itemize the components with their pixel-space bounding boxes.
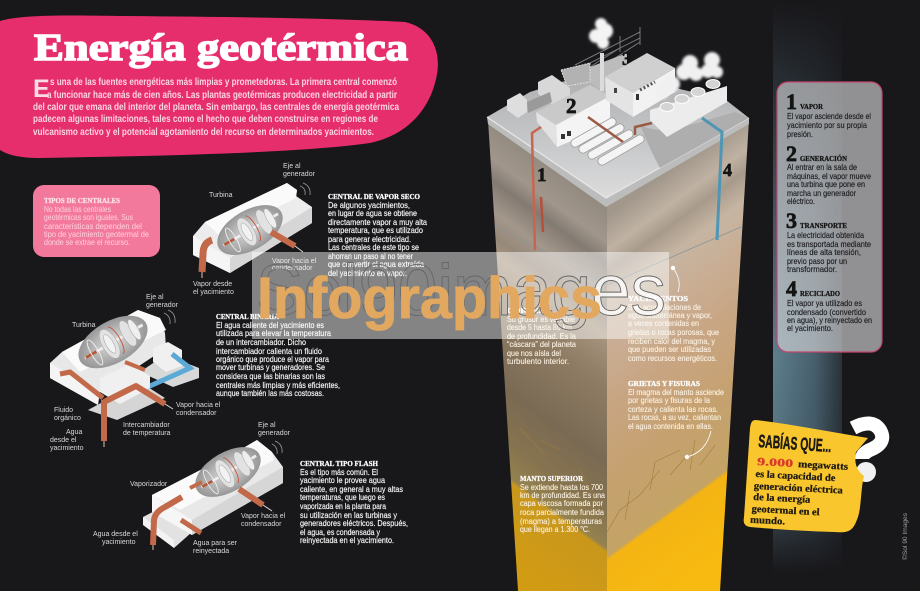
text: central de vapor seco: ahorran un paso al no tener	[328, 251, 413, 261]
text: yacimientos: grietas o rocas porosas, que	[628, 327, 719, 337]
step 1: yacimiento por su propia	[787, 120, 867, 130]
step 2: GENERACIÓN	[800, 153, 847, 163]
text: central binaria: utilizada para elevar la temperatura	[216, 328, 331, 338]
geological block	[487, 70, 749, 591]
step 3: previo paso por un	[787, 256, 847, 266]
step 4: el yacimiento.	[787, 323, 833, 333]
machine: tipo flash	[143, 437, 283, 550]
panel: tipos de centrales: características dependen del	[44, 222, 142, 231]
panel: tipos de centrales: donde se extrae el recurso.	[44, 238, 130, 247]
left face	[488, 120, 607, 591]
text: corteza	[507, 306, 576, 366]
labels: central binaria: Turbina	[72, 322, 96, 329]
label 1: 1	[537, 165, 546, 186]
text: central binaria: de un intercambiador. Dicho	[216, 337, 306, 347]
labels: vapor seco: generador	[283, 171, 316, 178]
step 4	[786, 276, 872, 333]
power plant	[507, 18, 727, 161]
header pink shape	[0, 16, 438, 158]
label 4: 4	[723, 160, 732, 180]
step 2: 2	[786, 141, 797, 166]
text: central tipo flash: CENTRAL TIPO FLASH	[300, 459, 378, 468]
title: Energía geotérmica	[34, 27, 408, 69]
machine: central binaria	[50, 305, 199, 447]
bubble text: geotermal en el	[751, 504, 820, 518]
bubble text	[750, 456, 848, 531]
labels: vapor seco	[193, 163, 317, 296]
labels: vapor seco: Eje al	[283, 163, 301, 170]
text: manto superior: km de profundidad. Es una	[520, 490, 605, 500]
cooling tower base	[650, 86, 727, 137]
step 1: 1	[786, 89, 797, 114]
text: central de vapor seco: para generar electricidad.	[328, 234, 411, 244]
text: corteza: CORTEZA	[507, 306, 552, 315]
machine: vapor seco	[193, 183, 312, 278]
text: grietas y fisuras: Las rocas, a su vez, calientan	[628, 412, 721, 422]
small buildings	[538, 75, 570, 105]
pipes	[532, 118, 732, 250]
text: central binaria: intercambiador calienta un fluido	[216, 346, 322, 356]
text: manto superior	[520, 474, 605, 534]
labels: central binaria: orgánico	[54, 415, 81, 422]
panel: tipos de centrales: TIPOS DE CENTRALES	[44, 196, 120, 205]
text: central tipo flash: generadores eléctricos. Después,	[300, 518, 408, 528]
labels: vapor seco: condensador	[272, 265, 313, 272]
text: central tipo flash: vaporizada en la planta para	[300, 501, 386, 511]
text: central tipo flash: reinyectada en el yacimiento.	[300, 535, 394, 545]
panel: tipos de centrales	[33, 185, 160, 257]
labels: tipo flash: condensador	[241, 521, 282, 528]
text: central binaria: orgánico que produce el vapor para	[216, 354, 329, 364]
callout: sabías que	[744, 420, 882, 532]
text: grietas y fisuras: GRIETAS Y FISURAS	[628, 379, 700, 388]
bubble text: megawatts	[798, 459, 848, 473]
labels: vapor seco: Vapor hacia el	[272, 258, 317, 265]
text: corteza: “cáscara” del planeta	[507, 339, 576, 349]
text: central tipo flash: caliente, en general a muy altas	[300, 484, 403, 494]
step 2: Al entrar en la sala de	[787, 162, 857, 172]
labels: tipo flash: reinyectada	[193, 548, 229, 555]
intro text: padecen algunas limitaciones, tales como el hecho que deben construirse en regiones de	[33, 114, 378, 125]
text: central binaria: aunque también las más costosas.	[216, 388, 324, 398]
watermark: Infographics	[257, 266, 602, 331]
right face	[607, 120, 749, 591]
condenser cylinders	[575, 122, 640, 161]
top face	[487, 70, 749, 198]
grey yard	[640, 112, 749, 168]
labels: central binaria: condensador	[176, 410, 217, 417]
text: yacimientos: como recursos energéticos.	[628, 353, 717, 363]
text: central de vapor seco: CENTRAL DE VAPOR SECO	[328, 192, 420, 201]
intro text: vulcanismo activo y el potencial agotamiento del recurso en determinados yacimientos.	[33, 127, 374, 138]
chimney	[600, 53, 604, 91]
text: central binaria	[216, 312, 340, 398]
intro text: E	[33, 75, 50, 103]
header panel	[0, 16, 438, 158]
panel: tipos de centrales: geotérmicas son iguales. Sus	[44, 213, 133, 222]
step 3: La electricidad obtenida	[787, 230, 864, 240]
labels: vapor seco: Turbina	[209, 192, 233, 199]
copper connectors	[588, 117, 652, 142]
labels: central binaria: Intercambiador	[123, 422, 170, 429]
panel: tipos de centrales: tipo de yacimiento geotermal de	[44, 230, 149, 239]
text: grietas y fisuras: corteza y calienta las rocas.	[628, 404, 718, 414]
step 2: una turbina que pone en	[787, 179, 865, 189]
text: central tipo flash	[300, 459, 408, 545]
text: grietas y fisuras	[628, 379, 724, 431]
step 2: máquinas, el vapor mueve	[787, 171, 871, 181]
production pipe	[532, 127, 541, 250]
watermark: Sol90images	[256, 251, 666, 331]
text: manto superior: capa viscosa formada por	[520, 498, 603, 508]
step 2: marcha un generador	[787, 188, 856, 198]
back wall	[590, 53, 627, 90]
text: central de vapor seco	[328, 192, 427, 278]
cooling steam	[655, 52, 723, 99]
step 4: condensado (convertido	[787, 307, 866, 317]
question mark icon	[853, 423, 882, 482]
step 2	[786, 141, 871, 206]
labels: tipo flash: Vapor hacia el	[241, 513, 286, 520]
labels: central binaria: Agua	[66, 429, 82, 436]
text: manto superior: que llegan a 1.300 °C.	[520, 524, 590, 534]
labels: tipo flash: Vaporizador	[130, 481, 168, 488]
bubble text: es la capacidad de	[755, 469, 836, 484]
credit: ©Sol 90 Images	[901, 512, 909, 560]
step 4: El vapor ya utilizado es	[787, 298, 862, 308]
panel: process steps	[777, 82, 882, 352]
cracks	[520, 428, 715, 532]
bubble text: generación eléctrica	[754, 481, 843, 497]
step 1: presión.	[787, 129, 813, 139]
pylons and lines	[575, 27, 640, 74]
labels: central binaria: de temperatura	[123, 430, 171, 437]
text: manto superior: roca parcialmente fundida	[520, 507, 604, 517]
step 4: RECICLADO	[800, 289, 840, 298]
step 3: transformador.	[787, 264, 837, 274]
intro text: del calor que emana del interior del planeta. Sin embargo, las centrales de energía geotérmica	[33, 102, 399, 113]
step 1: El vapor asciende desde el	[787, 111, 871, 121]
building 2	[536, 85, 610, 125]
text: central binaria: El agua caliente del yacimiento es	[216, 320, 324, 330]
text: central binaria: centrales más limpias y más eficientes,	[216, 380, 340, 390]
labels: tipo flash	[93, 422, 291, 555]
building 3	[605, 53, 675, 93]
fault lines	[495, 225, 741, 285]
bubble heading: SABÍAS QUE...	[758, 430, 832, 456]
step 3: 3	[786, 208, 797, 233]
labels: central binaria: Eje al	[146, 294, 164, 301]
intro text: s una de las fuentes energéticas más limpias y prometedoras. La primera central comenzó	[50, 77, 397, 88]
step 3: TRANSPORTE	[800, 221, 847, 230]
chimney smoke	[589, 18, 613, 49]
text: central tipo flash: el agua, es condensada y	[300, 527, 381, 537]
background light strip	[773, 0, 842, 591]
panel: tipos de centrales: No todas las centrales	[44, 205, 111, 214]
text: central tipo flash: Es el tipo más común. El	[300, 467, 378, 477]
text: corteza: Su grosor es variable	[507, 314, 575, 324]
labels: tipo flash: Eje al	[258, 422, 276, 429]
rising arrow	[541, 197, 543, 232]
text: grietas y fisuras: El magma del manto asciende	[628, 387, 724, 397]
text: central de vapor seco: Las centrales de este tipo se	[328, 242, 419, 252]
step 1	[786, 89, 871, 139]
text: yacimientos: reciben calor del magma, y	[628, 336, 716, 346]
callout dots	[671, 266, 711, 459]
text: central de vapor seco: directamente vapor a muy alta	[328, 217, 427, 227]
text: corteza: desde 5 hasta 80 km	[507, 322, 572, 332]
text: grietas y fisuras: el agua contenida en ellas.	[628, 421, 713, 431]
bubble text: 9.000	[757, 456, 794, 470]
labels: central binaria: yacimiento	[50, 445, 84, 452]
step 3	[786, 208, 871, 274]
labels: tipo flash: Agua para ser	[193, 540, 238, 547]
text: central de vapor seco: del yacimiento en vapor.	[328, 268, 407, 278]
labels: central binaria	[50, 294, 221, 452]
text: central binaria: mover turbinas y generadores. Se	[216, 362, 325, 372]
text: central de vapor seco: De algunos yacimientos,	[328, 200, 410, 210]
yellow bubble	[744, 420, 868, 532]
intro text	[33, 75, 399, 138]
intro text: a funcionar hace más de cien años. Las plantas geotérmicas producen electricidad a partir	[47, 90, 397, 101]
text: yacimientos	[628, 294, 719, 363]
text: central de vapor seco: que convertir el agua extraída	[328, 259, 424, 269]
text: yacimientos: Son acumulaciones de	[628, 302, 701, 312]
labels: vapor seco: el yacimiento	[193, 289, 234, 296]
label 2: 2	[566, 94, 576, 118]
step 4: en agua), y reinyectado en	[787, 315, 872, 325]
text: central binaria: CENTRAL BINARIA	[216, 312, 279, 321]
top face rim	[487, 117, 749, 207]
labels: central binaria: Fluido	[54, 407, 73, 414]
bubble text: mundo.	[750, 515, 786, 528]
transformer fins	[561, 63, 590, 86]
text: corteza: que nos aísla del	[507, 348, 561, 358]
text: central de vapor seco: en lugar de agua se obtiene	[328, 208, 417, 218]
text: corteza: turbulento interior.	[507, 356, 569, 366]
labels: tipo flash: Agua desde el	[93, 531, 138, 538]
text: central tipo flash: yacimiento le provee agua	[300, 475, 385, 485]
label 3: 3	[622, 49, 632, 70]
labels: central binaria: generador	[146, 302, 179, 309]
step 1: VAPOR	[800, 102, 823, 111]
step 2: eléctrico.	[787, 196, 815, 206]
text: central binaria: considera que las binarias son las	[216, 371, 325, 381]
labels: tipo flash: generador	[258, 430, 291, 437]
labels: central binaria: desde el	[50, 437, 77, 444]
labels: vapor seco: Vapor desde	[193, 281, 232, 288]
step 3: es transportada mediante	[787, 239, 871, 249]
text: central tipo flash: temperaturas, que luego es	[300, 492, 385, 502]
text: yacimientos: agua subterránea y vapor,	[628, 310, 712, 320]
injection pipe	[702, 118, 722, 240]
text: grietas y fisuras: por grietas y fisuras de la	[628, 395, 710, 405]
bubble text: de la energía	[753, 492, 811, 506]
text: yacimientos: que pueden ser utilizadas	[628, 344, 711, 354]
text: yacimientos: YACIMIENTOS	[628, 294, 688, 303]
step 4: 4	[786, 276, 797, 301]
labels: central binaria: Vapor hacia el	[176, 402, 221, 409]
text: manto superior: MANTO SUPERIOR	[520, 474, 583, 483]
labels: tipo flash: yacimiento	[102, 539, 136, 546]
step 3: líneas de alta tensión,	[787, 247, 861, 257]
text: central tipo flash: su utilización en las turbinas y	[300, 510, 398, 520]
text: corteza: de profundidad. Es la	[507, 331, 576, 341]
text: manto superior: (magma) a temperaturas	[520, 516, 602, 526]
text: central de vapor seco: temperatura, que es utilizado	[328, 225, 423, 235]
text: manto superior: Se extiende hasta los 700	[520, 482, 603, 492]
text: yacimientos: a veces contenidas en	[628, 318, 699, 328]
